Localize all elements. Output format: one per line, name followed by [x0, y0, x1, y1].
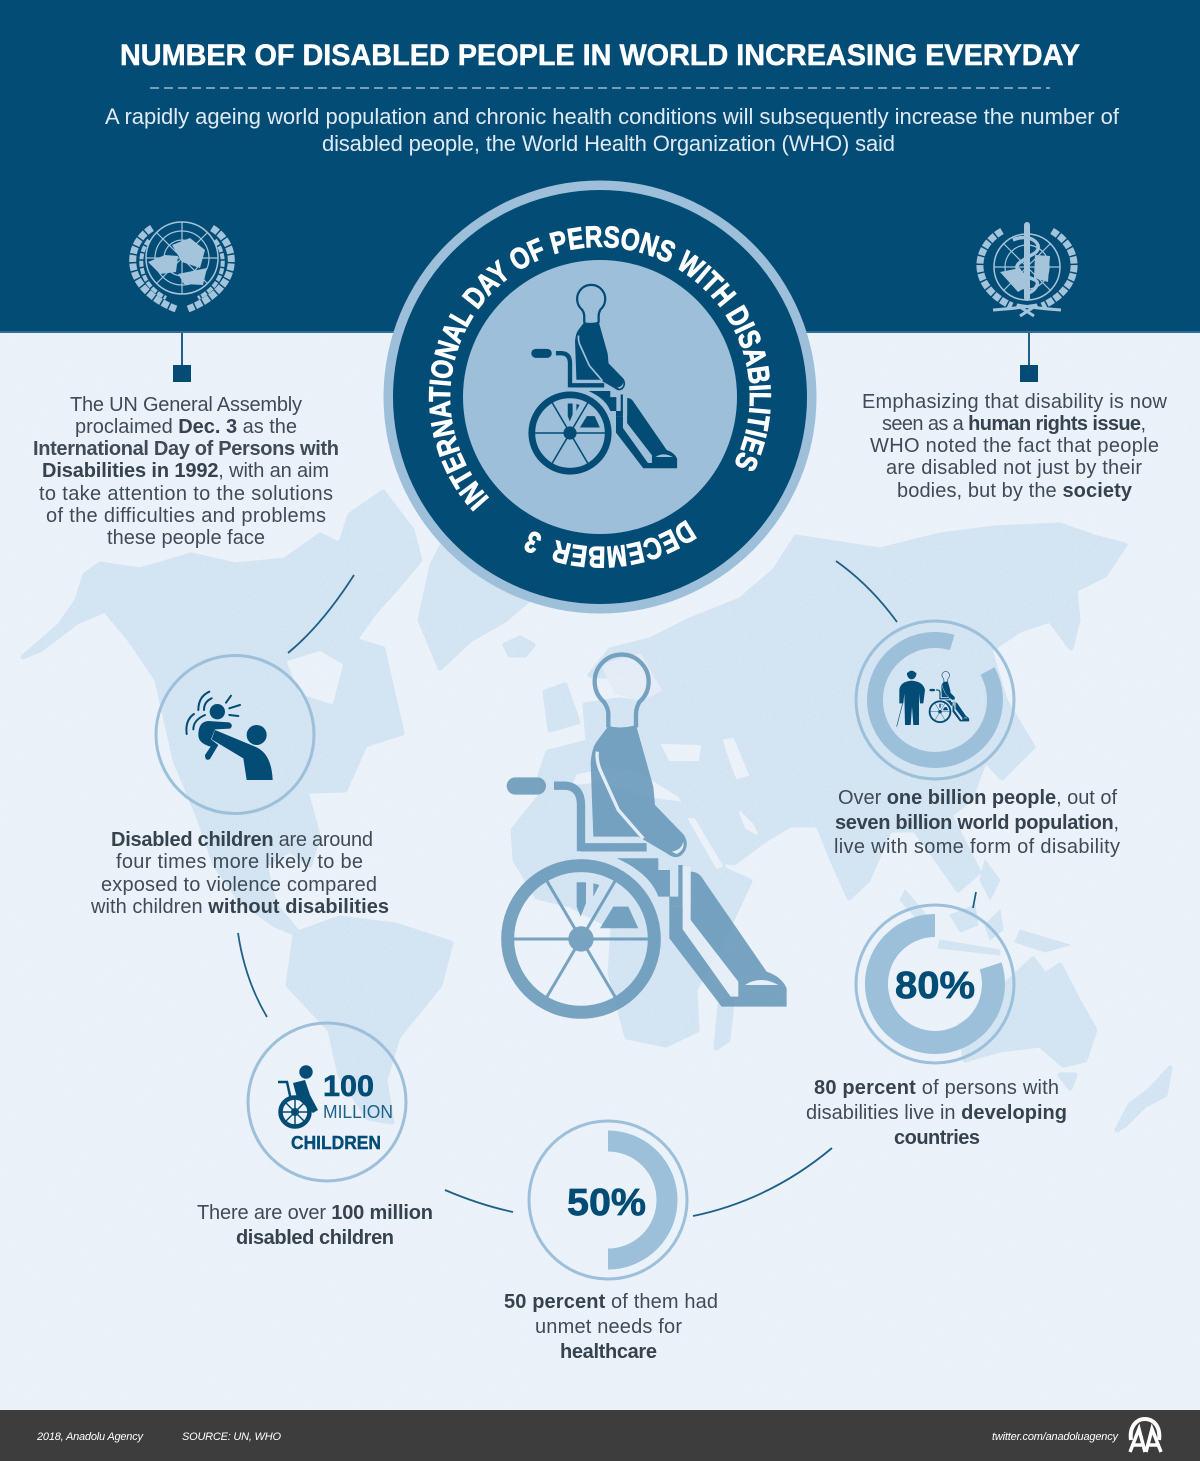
subtitle: disabled people, the World Health Organization (WHO) said	[322, 131, 895, 156]
text: UN General Assembly: of the difficulties and problems	[46, 505, 326, 527]
text: 50 percent: healthcare	[560, 1341, 657, 1363]
badge arc heading: INTERNATIONAL DAY OF PERSONS WITH DISABILITIES	[428, 226, 772, 512]
icon: small wheelchair	[929, 671, 969, 722]
text: violence: four times more likely to be	[116, 851, 363, 873]
central badge	[384, 180, 816, 614]
text: WHO statement: WHO noted the fact that people	[870, 435, 1159, 457]
text: one billion: Over one billion people, out of	[838, 787, 1117, 809]
text: 100 million children	[197, 1202, 433, 1249]
text: 50 percent	[504, 1291, 718, 1363]
text: WHO statement: are disabled not just by their	[886, 457, 1142, 479]
text: UN General Assembly: these people face	[107, 527, 265, 549]
paper texture	[0, 332, 1200, 1410]
panel: 80 percent: 80%	[895, 965, 975, 1007]
text: one billion	[834, 787, 1120, 858]
footer: 2018, Anadolu Agency	[36, 1431, 144, 1443]
panel: 100 million children: 100	[323, 1070, 374, 1103]
text: violence: Disabled children are around	[111, 829, 373, 851]
footer: twitter.com/anadoluagency	[992, 1431, 1120, 1443]
text: WHO statement: Emphasizing that disability is now	[862, 391, 1168, 413]
badge wheelchair icon	[531, 285, 677, 471]
panel: one billion	[856, 621, 1014, 779]
text: 100 million children: disabled children	[236, 1227, 394, 1249]
text: 80 percent	[806, 1077, 1067, 1149]
footer: SOURCE: UN, WHO	[182, 1431, 281, 1443]
icon: WHO emblem	[980, 225, 1074, 316]
text: violence: exposed to violence compared	[101, 874, 377, 896]
title: NUMBER OF DISABLED PEOPLE IN WORLD INCREASING EVERYDAY	[120, 39, 1080, 72]
text: one billion: seven billion world population,	[835, 812, 1119, 834]
large wheelchair figure	[507, 655, 787, 1012]
text: UN General Assembly: Disabilities in 1992, with an aim	[42, 460, 329, 482]
connector: WHO to text	[1020, 333, 1038, 382]
panel: 100 million children: CHILDREN	[291, 1133, 381, 1153]
icon: blind man	[897, 671, 925, 727]
footer	[0, 1410, 1200, 1461]
panel: 100 million children: MILLION	[323, 1102, 393, 1122]
text: 80 percent: disabilities live in developing	[806, 1102, 1067, 1124]
icon: child lifted by adult	[186, 692, 273, 780]
panel: violence	[156, 656, 314, 814]
text: WHO statement: seen as a human rights issue,	[882, 413, 1146, 435]
text: UN General Assembly: to take attention to the solutions	[39, 483, 333, 505]
badge date: DECEMBER 3	[524, 520, 697, 568]
text: UN General Assembly: The UN General Assembly	[70, 394, 302, 416]
text: 80 percent: countries	[894, 1127, 980, 1149]
icon: AA logo	[1130, 1419, 1161, 1452]
world map	[23, 478, 1170, 1130]
connector: UN to text	[173, 333, 191, 382]
header band	[0, 0, 1200, 333]
text: 50 percent: unmet needs for	[535, 1316, 682, 1338]
text: UN General Assembly: proclaimed Dec. 3 as the	[75, 416, 297, 438]
text: WHO statement: bodies, but by the society	[897, 480, 1133, 502]
panel: 50 percent: 50%	[567, 1182, 646, 1224]
text: one billion: live with some form of disability	[834, 836, 1120, 858]
icon: UN emblem	[133, 222, 231, 309]
panel: 50 percent	[529, 1121, 687, 1279]
text: 50 percent: 50 percent of them had	[504, 1291, 718, 1313]
icon: child wheelchair	[278, 1065, 318, 1126]
panel: 100 million children	[248, 1023, 406, 1181]
text: UN General Assembly	[33, 394, 339, 549]
text: UN General Assembly: International Day of Persons with	[33, 438, 339, 460]
panel: 80 percent	[856, 905, 1014, 1063]
subtitle	[105, 88, 1120, 156]
text: violence: with children without disabilities	[90, 896, 389, 918]
text: 100 million children: There are over 100 million	[197, 1202, 433, 1224]
text: 80 percent: 80 percent of persons with	[814, 1077, 1059, 1099]
text: violence	[90, 829, 389, 918]
subtitle: A rapidly ageing world population and chronic health conditions will subsequently increase the number of	[105, 104, 1120, 129]
text: WHO statement	[862, 391, 1168, 502]
arc connectors	[238, 561, 976, 1216]
